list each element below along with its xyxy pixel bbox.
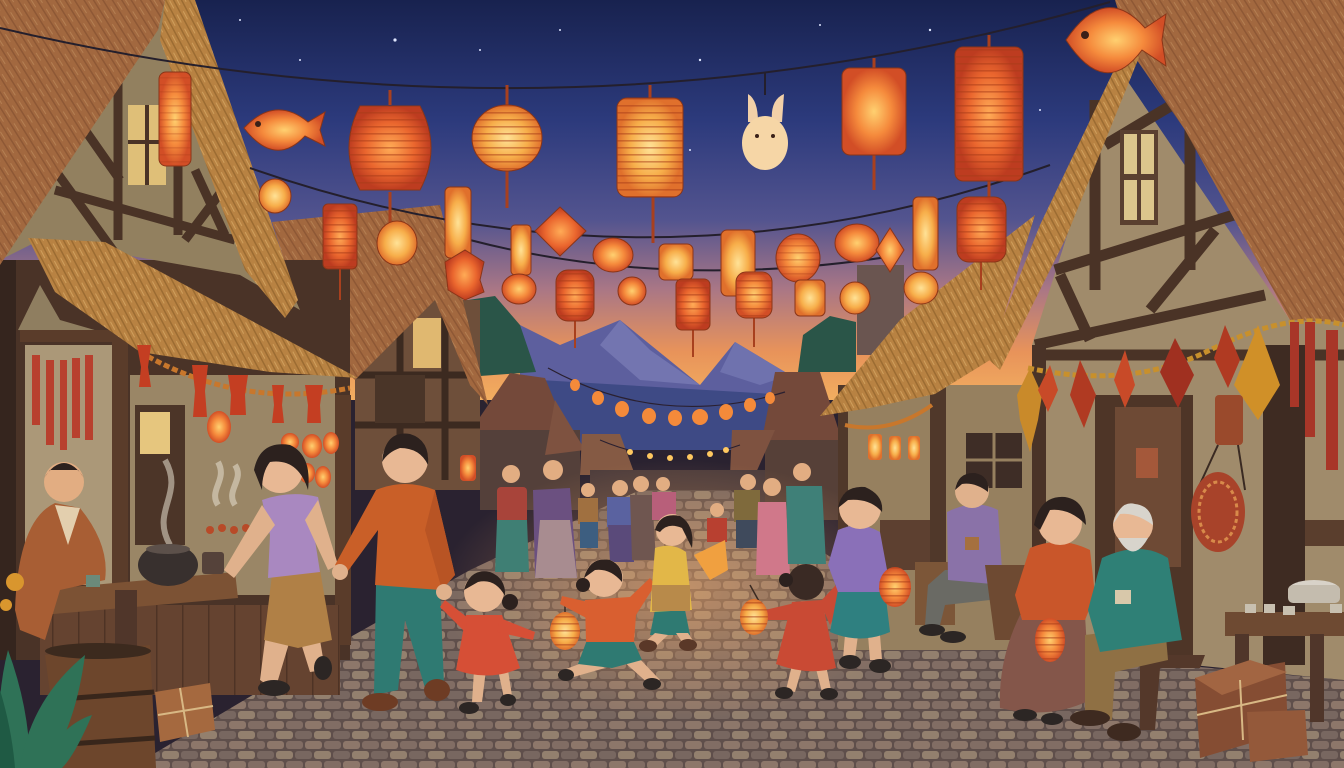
child in orange shirt: [558, 559, 661, 690]
lantern: orange cylinder right: [842, 58, 906, 190]
lantern: small yellow square: [795, 280, 825, 316]
lantern: yellow short: [659, 244, 693, 280]
thatched roof: right large: [987, 0, 1344, 370]
trees behind houses: [468, 296, 856, 376]
man in orange sweater: [332, 434, 455, 711]
lantern: narrow right: [913, 197, 938, 270]
lantern: round orange right mid: [776, 234, 820, 282]
lantern: orange mid: [736, 272, 772, 347]
lantern: large red cylinder: [955, 35, 1023, 245]
small lanterns: right stall: [845, 405, 932, 460]
house: back left timber house: [272, 205, 488, 490]
right stall building: [838, 385, 1043, 650]
lantern: yellow tall: [617, 85, 683, 243]
thatched roof: left upper: [0, 0, 298, 318]
lantern: double stack: [502, 225, 536, 304]
distant lantern strings: [548, 368, 785, 461]
wall lanterns: left stall: [207, 411, 476, 488]
right table with bowls: [1225, 580, 1344, 722]
lantern: oval right: [835, 224, 879, 262]
garland: right house: [1017, 321, 1344, 470]
girl in red with lantern: [740, 564, 856, 700]
lantern: fish left: [244, 110, 325, 150]
stall counter: [38, 572, 340, 695]
lantern: large red round: [349, 90, 431, 232]
street warm glow: [440, 460, 920, 720]
child in yellow jacket: [639, 514, 697, 652]
lantern: diamond: [535, 207, 586, 256]
lantern: rabbit: [742, 72, 788, 170]
lantern: pale round under red: [377, 221, 417, 265]
lantern: upper left cylinder: [159, 72, 191, 166]
steam: [164, 460, 238, 545]
girl in lilac and teal: [828, 487, 911, 673]
girl in red dress: [440, 571, 535, 714]
child lantern floating: [694, 540, 728, 580]
plant: [0, 650, 92, 768]
mountains: [520, 320, 790, 450]
lantern: yellow round: [472, 85, 542, 208]
lantern: narrow yellow: [445, 187, 471, 258]
lantern: round under narrow: [904, 272, 938, 304]
cooking pot: [138, 524, 250, 586]
distant houses: [478, 372, 845, 520]
lantern: fish right: [1066, 8, 1166, 73]
thatched roof: left stall: [28, 238, 358, 378]
woman seated in orange: [1000, 497, 1095, 725]
lantern: small oval mid: [593, 238, 633, 272]
house: left upper gable: [0, 0, 300, 310]
flowers by stall: [0, 573, 24, 611]
lantern: tall yellow mid: [721, 230, 755, 296]
lantern: red short: [676, 279, 710, 357]
woman in lilac top: [224, 444, 338, 696]
crates: [1195, 660, 1308, 762]
lantern: red round right: [957, 197, 1006, 290]
lantern: small round mid: [618, 277, 646, 305]
hanging decorations on right wall: [1191, 395, 1245, 552]
man seated in lilac: [915, 473, 1030, 643]
house: left stall lower wall: [0, 260, 351, 660]
sky: [0, 0, 1344, 400]
garland: left stall: [137, 345, 350, 423]
barrel and box: [45, 643, 215, 768]
hanging ribbons: left stall: [32, 355, 93, 450]
thatched roof: right stall: [820, 215, 1035, 416]
stars: [239, 19, 1041, 151]
lantern: small round right: [840, 282, 870, 314]
lantern: small round left: [259, 179, 291, 213]
background crowd: [495, 460, 826, 578]
house: right large timber wall: [1032, 70, 1344, 680]
elderly man in green: [1070, 503, 1205, 741]
distant stone tower: [857, 265, 904, 355]
lantern: flower: [445, 250, 484, 300]
cobblestone street: [130, 490, 1344, 768]
lantern: pale diamond right: [876, 228, 904, 272]
vendor: [15, 462, 106, 640]
hand-held lantern: left child: [550, 600, 580, 650]
lantern: red cylinder left: [323, 204, 357, 300]
lantern: red mid round: [556, 270, 594, 348]
lantern strings: [0, 2, 1110, 270]
